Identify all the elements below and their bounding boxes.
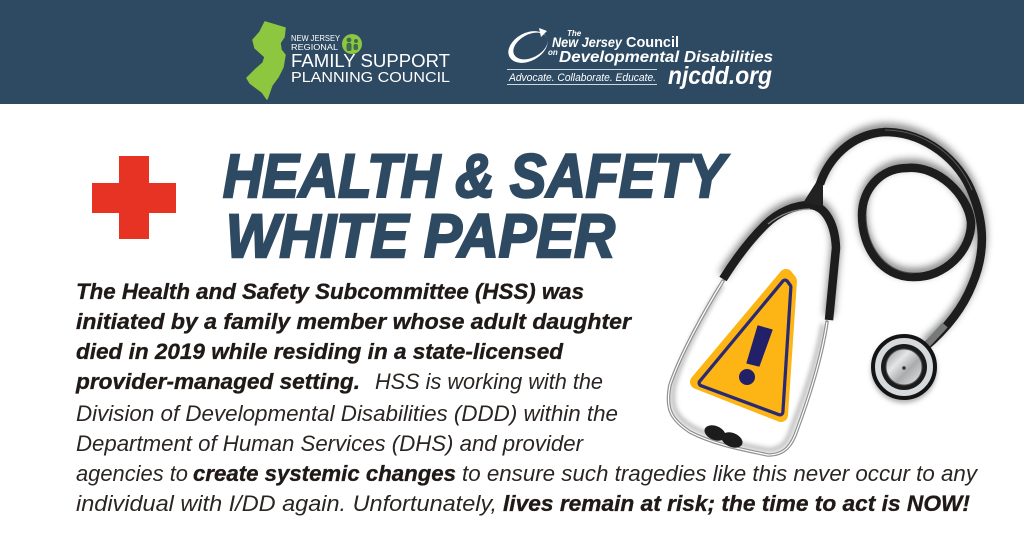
black headset arch (723, 181, 836, 320)
logo text: The (567, 29, 582, 38)
icon: red cross (92, 156, 176, 239)
coiled tube (820, 130, 982, 350)
icon: New Jersey state shape (247, 22, 285, 99)
silver headset tubes (668, 281, 827, 455)
header band (0, 0, 1024, 104)
warning triangle (697, 276, 790, 415)
logo text (507, 29, 773, 90)
body paragraph: provider-managed setting. (75, 369, 360, 394)
logo text: Council (626, 34, 679, 51)
headset inner shadow (673, 285, 823, 450)
logo text: Advocate. Collaborate. Educate. (508, 72, 656, 84)
icon: swirl arrow (503, 25, 553, 69)
body paragraph: Department of Human Services (DHS) and provider (76, 431, 584, 456)
body paragraph: agencies to (76, 461, 188, 486)
body paragraph: to ensure such tragedies like this never occur to any (462, 461, 979, 486)
tube shadow (723, 128, 982, 343)
stethoscope illustration (668, 128, 982, 455)
body paragraph (75, 279, 979, 516)
logo text: REGIONAL (291, 43, 339, 52)
icon: family circle (342, 34, 362, 54)
logo text (291, 34, 450, 86)
body paragraph: initiated by a family member whose adult daughter (76, 309, 632, 334)
logo: New Jersey Council on Developmental Disabilities (503, 25, 773, 90)
title: WHITE PAPER (226, 202, 615, 270)
body paragraph: Division of Developmental Disabilities (DDD) within the (76, 401, 618, 426)
logo text: njcdd.org (668, 62, 772, 90)
title: HEALTH & SAFETY (223, 142, 730, 210)
logo text: on (548, 48, 558, 57)
body paragraph: create systemic changes (193, 461, 456, 486)
logo text: NEW JERSEY (291, 34, 341, 43)
chest piece (871, 336, 937, 403)
body paragraph: The Health and Safety Subcommittee (HSS) was (76, 279, 584, 304)
exclamation mark (739, 326, 772, 385)
ear tips (702, 422, 745, 451)
body paragraph: lives remain at risk; the time to act is NOW! (503, 491, 971, 516)
body paragraph: individual with I/DD again. Unfortunately, (76, 491, 497, 516)
body paragraph: HSS is working with the (375, 369, 603, 394)
logo text: New Jersey (552, 34, 623, 50)
logo text: Developmental Disabilities (559, 49, 773, 66)
logo text: PLANNING COUNCIL (291, 69, 450, 86)
body paragraph: died in 2019 while residing in a state-licensed (76, 339, 564, 364)
logo: Family Support Planning Council (247, 22, 450, 99)
title (223, 142, 730, 270)
logo text: FAMILY SUPPORT (291, 51, 450, 71)
